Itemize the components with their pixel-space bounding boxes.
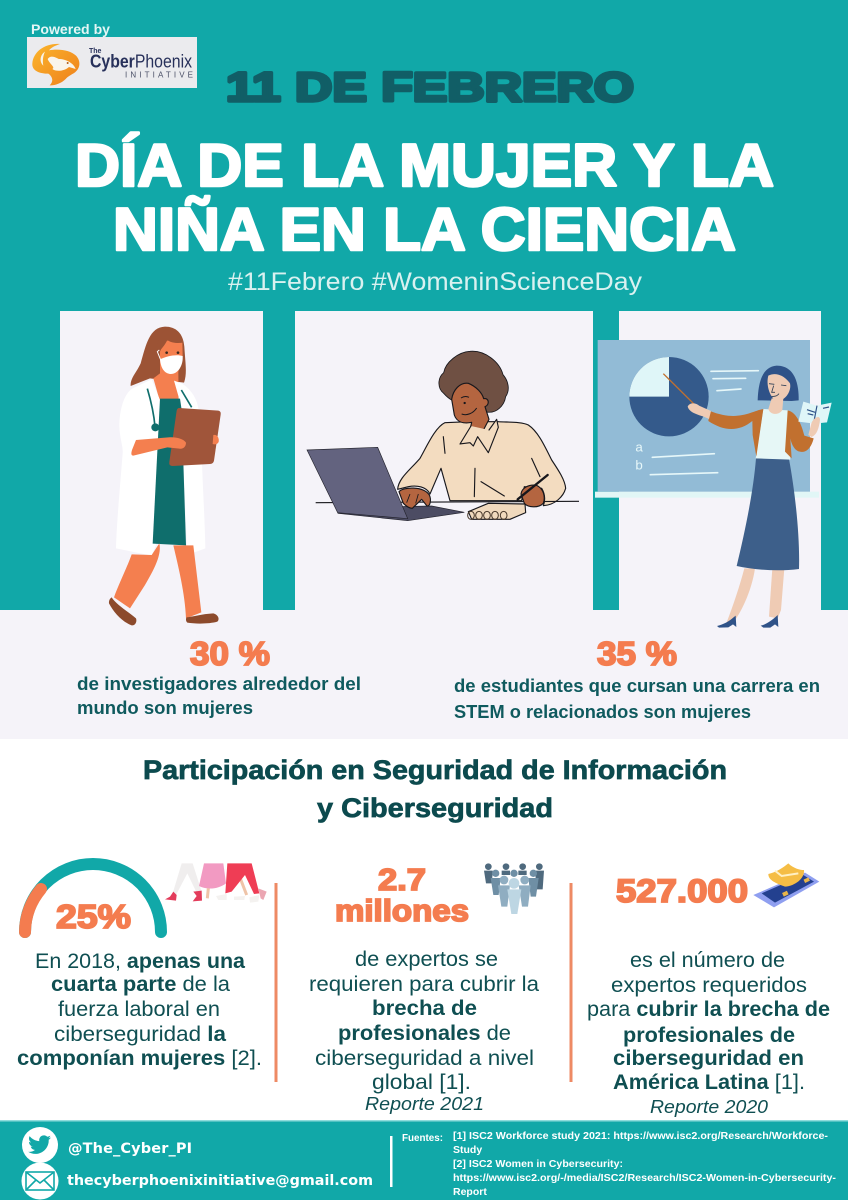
raised hand	[808, 417, 820, 437]
shoes	[717, 616, 736, 628]
shirt	[398, 422, 566, 506]
hand with pointer	[688, 403, 711, 419]
text: 527.000 description: para cubrir la brecha de	[587, 998, 830, 1021]
pie chart	[629, 357, 709, 436]
divider	[274, 883, 278, 1082]
illustration: doctor	[109, 327, 221, 625]
mask	[160, 355, 183, 374]
laptop screen	[307, 447, 408, 519]
stat: 2.7 millones: millones	[335, 893, 469, 928]
sources: Study	[453, 1144, 482, 1156]
neck and face	[452, 383, 489, 437]
text: 25 percent description: En 2018, apenas una	[35, 950, 245, 973]
panel: computer background	[295, 311, 593, 611]
board text lines	[650, 371, 758, 475]
text: 527.000 description: profesionales de	[623, 1024, 795, 1047]
background: white section	[0, 739, 848, 1121]
icon: phone with shield	[753, 863, 819, 907]
skirt	[737, 458, 799, 570]
30 percent number: 30 %	[190, 635, 270, 672]
text: 527.000 description: América Latina [1].	[613, 1071, 805, 1094]
report 2021: Reporte 2021	[365, 1094, 484, 1114]
gauge: 25 percent	[25, 864, 161, 935]
date heading: 11 DE FEBRERO	[226, 64, 634, 110]
stat: 35 percent students	[454, 635, 820, 722]
illustration: woman at laptop	[307, 351, 579, 521]
open book	[798, 402, 832, 424]
section heading: Participación en Seguridad de Información	[143, 755, 727, 785]
title line 1: DÍA DE LA MUJER Y LA	[75, 132, 774, 199]
board	[598, 340, 810, 492]
sources: https://www.isc2.org/-/media/ISC2/Research/ISC2-Women-in-Cybersecurity-	[453, 1172, 837, 1184]
title line 2: NIÑA EN LA CIENCIA	[113, 196, 736, 263]
logo background	[27, 37, 197, 88]
legs	[727, 568, 755, 624]
writing hand	[521, 485, 544, 507]
eyes	[165, 351, 168, 354]
hashtags: #11Febrero #WomeninScienceDay	[228, 268, 643, 296]
divider	[570, 883, 572, 1082]
face details	[461, 396, 477, 415]
text: 25 percent description: cuarta parte de la	[51, 973, 230, 996]
panel: teacher background	[619, 311, 821, 611]
gauge value	[25, 889, 41, 932]
typing hand	[399, 488, 430, 508]
powered by label: Powered by	[31, 22, 111, 37]
panel: doctor background	[60, 311, 263, 611]
sources: Report	[453, 1186, 487, 1198]
powered by logo block	[27, 22, 197, 88]
stat: 527.000: 527.000	[616, 873, 748, 909]
icon: group of people	[484, 863, 544, 914]
35 percent caption: de estudiantes que cursan una carrera en	[454, 676, 820, 696]
text: 2.7 millones description: de expertos se	[355, 948, 498, 971]
text: 2.7 millones description	[309, 948, 539, 1114]
text: 2.7 millones description: global [1].	[372, 1071, 471, 1094]
icon: walking women	[165, 863, 267, 903]
arm	[131, 437, 186, 456]
stat: 30 percent researchers: mundo son mujeres	[77, 698, 253, 718]
logo wordmark: INITIATIVE	[125, 70, 193, 80]
stat: 35 percent students: STEM o relacionados son mujeres	[454, 702, 751, 722]
shoes	[109, 597, 136, 625]
illustration: teacher at board: b	[635, 458, 643, 473]
gauge number: 25%	[56, 898, 131, 935]
text: 527.000 description	[587, 949, 830, 1117]
text: 25 percent description: componían mujeres [2].	[17, 1047, 262, 1070]
hair	[758, 366, 799, 401]
section heading	[143, 755, 727, 823]
text: 25 percent description: ciberseguridad la	[54, 1023, 226, 1046]
hair	[439, 351, 508, 412]
report 2020: Reporte 2020	[650, 1097, 768, 1117]
text: 2.7 millones description: requieren para cubrir la	[309, 973, 539, 996]
white coat	[116, 379, 160, 556]
title	[75, 132, 774, 263]
clipboard	[169, 408, 221, 466]
stat: 2.7 millones	[335, 862, 469, 928]
text: 2.7 millones description: profesionales de	[338, 1022, 511, 1045]
illustration: teacher at board	[595, 340, 832, 628]
stat: 30 percent researchers	[77, 635, 361, 718]
text: 25 percent description	[17, 950, 262, 1070]
fringe	[157, 330, 183, 353]
board letters: a	[635, 440, 643, 455]
collar	[460, 419, 498, 453]
logo wordmark: The	[89, 48, 102, 55]
cardigan	[708, 409, 814, 458]
sources label: Fuentes:	[402, 1132, 443, 1144]
laptop base	[338, 506, 464, 521]
text: 527.000 description: expertos requeridos	[611, 974, 807, 997]
sources list: [1] ISC2 Workforce study 2021: https://www.isc2.org/Research/Workforce-	[453, 1130, 829, 1142]
divider	[390, 1136, 392, 1187]
stat: 2.7 millones: 2.7	[378, 862, 426, 897]
face	[768, 374, 790, 401]
gauge track	[25, 864, 161, 932]
logo wordmark: CyberPhoenix	[90, 50, 193, 72]
neck	[768, 398, 783, 414]
legs	[114, 543, 160, 608]
shirt folds	[443, 437, 540, 497]
board frame	[595, 492, 819, 498]
sources	[402, 1130, 837, 1198]
dress	[153, 399, 186, 545]
text: 25 percent description: fuerza laboral en	[58, 998, 220, 1021]
top	[756, 409, 790, 460]
logo wordmark	[89, 48, 193, 80]
text: 527.000 description: ciberseguridad en	[613, 1047, 804, 1070]
back hair	[131, 327, 186, 386]
35 percent number: 35 %	[597, 635, 677, 672]
sources: [2] ISC2 Women in Cybersecurity:	[453, 1158, 623, 1170]
pointer	[663, 374, 697, 407]
email address: thecyberphoenixinitiative@gmail.com	[67, 1173, 373, 1189]
text: 2.7 millones description: ciberseguridad a nivel	[315, 1047, 534, 1070]
text: 2.7 millones description: brecha de	[372, 997, 477, 1020]
icon: mail	[22, 1162, 58, 1200]
hand	[213, 435, 219, 444]
twitter handle: @The_Cyber_PI	[68, 1141, 192, 1157]
background: light stats band	[0, 610, 848, 739]
table line	[316, 501, 579, 503]
30 percent caption: de investigadores alrededor del	[77, 674, 361, 694]
footer bar	[0, 1120, 848, 1200]
pen	[518, 475, 548, 499]
background: teal header	[0, 0, 848, 611]
text: 527.000 description: es el número de	[630, 949, 785, 972]
notebook	[468, 503, 526, 519]
icon: phoenix	[32, 44, 79, 85]
icon: twitter	[22, 1127, 58, 1163]
stethoscope	[147, 389, 155, 427]
section heading: y Ciberseguridad	[317, 793, 553, 823]
face and neck	[153, 341, 183, 399]
